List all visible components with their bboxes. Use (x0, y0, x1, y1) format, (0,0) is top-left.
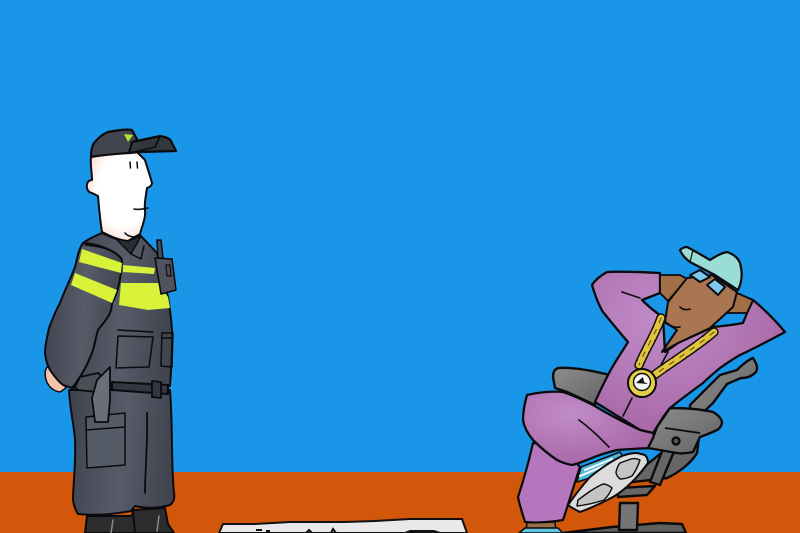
paper on the floor (219, 519, 467, 533)
officer cap (91, 130, 176, 157)
officer arm (45, 243, 122, 388)
man head (662, 275, 737, 352)
police officer (45, 130, 176, 533)
officer boots (85, 508, 174, 533)
chair backrest top (553, 368, 610, 405)
man foot and ankle (519, 522, 563, 533)
man right hand (722, 293, 753, 313)
officer jacket (72, 233, 173, 388)
chair base (563, 523, 686, 533)
chair backrest side (690, 358, 757, 425)
holster and pistol (75, 367, 110, 422)
man sunglasses (690, 270, 725, 295)
relaxed man (518, 247, 785, 533)
officer trousers (69, 390, 174, 515)
cap badge (124, 134, 133, 142)
office chair (553, 358, 757, 533)
body camera (155, 240, 176, 294)
man thigh (523, 392, 658, 465)
background: ground (0, 472, 800, 533)
man upper garment (592, 272, 785, 433)
man sneaker (568, 452, 648, 512)
chair hub (618, 486, 655, 497)
man lower leg (518, 443, 580, 522)
officer neck and head (87, 150, 152, 241)
chair column (619, 503, 638, 530)
officer hand (45, 367, 66, 392)
reflective stripes (119, 265, 170, 310)
duty belt (112, 382, 168, 394)
chair seat (625, 430, 700, 483)
chest pockets (116, 330, 173, 368)
man cap (680, 247, 742, 290)
chair arm support (650, 436, 678, 485)
thigh pocket (86, 413, 125, 468)
chair armrest (648, 408, 722, 453)
man left hand (660, 275, 687, 301)
gold chain (639, 318, 714, 376)
gold medallion (628, 369, 656, 397)
belt buckle (152, 381, 161, 398)
